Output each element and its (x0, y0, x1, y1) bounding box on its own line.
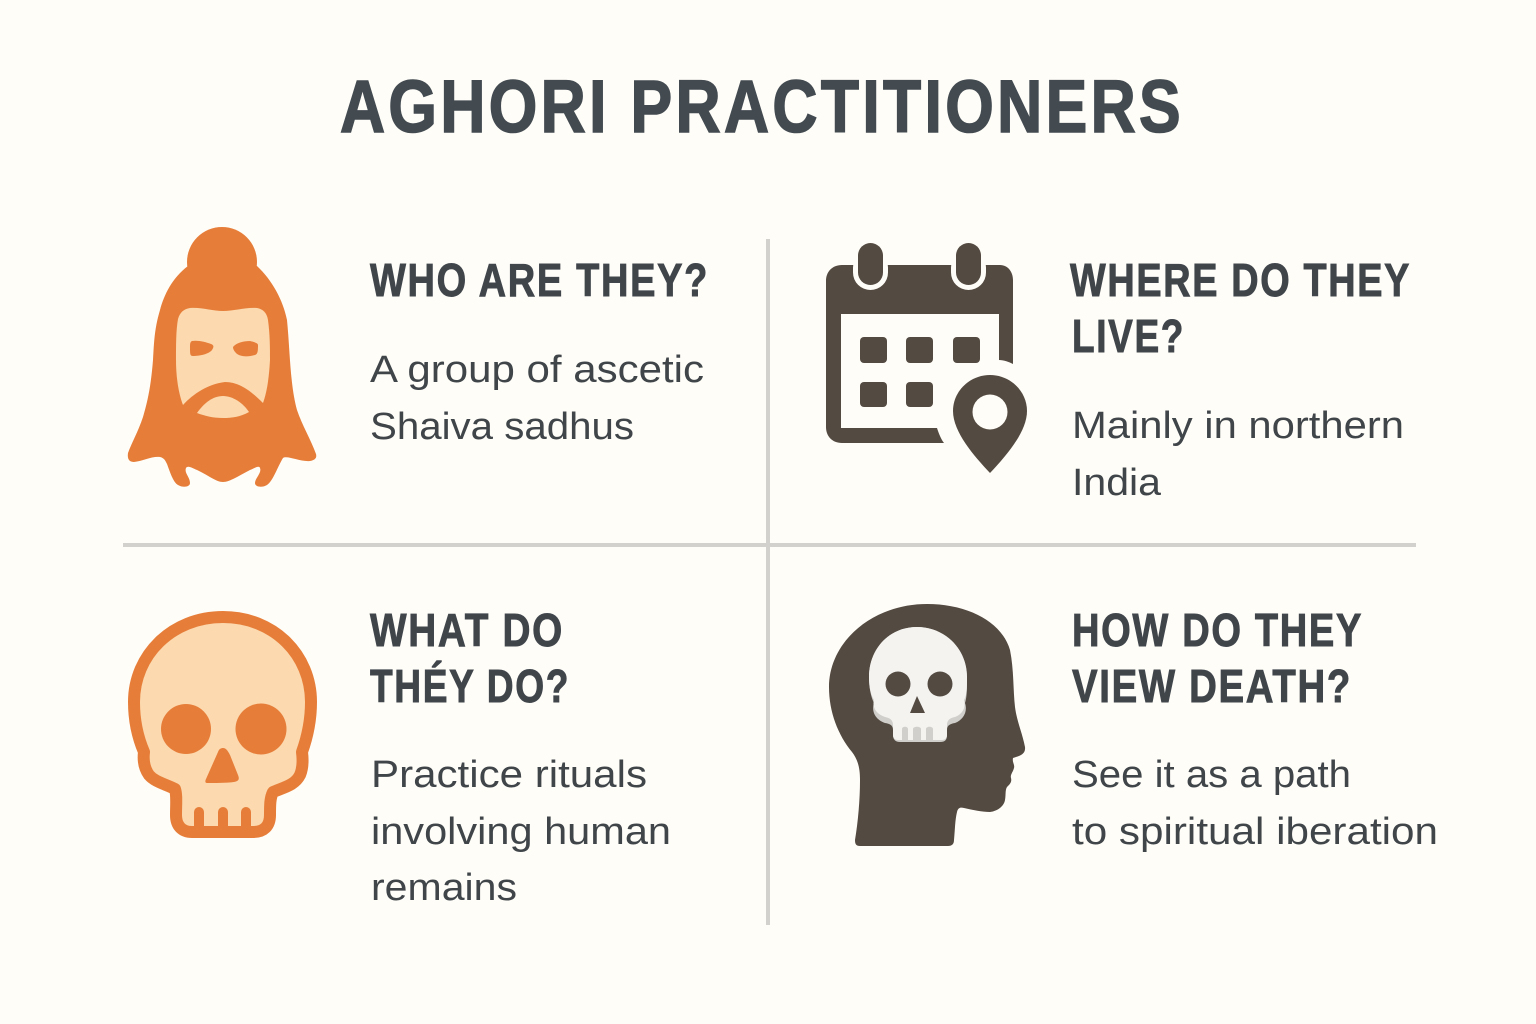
body: who are they (370, 349, 704, 448)
body: what do they do: remains (371, 867, 517, 909)
heading: what do they do (370, 604, 570, 712)
body: where do they live (1072, 405, 1404, 504)
heading: how do they view death: VIEW DEATH? (1072, 660, 1352, 712)
body: what do they do: Practice rituals (371, 754, 647, 796)
heading: what do they do: WHAT DO (370, 604, 564, 656)
icon: calendar with location pin (826, 240, 1027, 473)
heading: how do they view death: HOW DO THEY (1072, 604, 1363, 656)
heading: how do they view death (1072, 604, 1363, 712)
icon: head silhouette with skull (829, 604, 1025, 846)
body: how do they view death: to spiritual iberation (1072, 811, 1438, 853)
body: who are they: A group of ascetic (370, 349, 704, 391)
title: AGHORI PRACTITIONERS (340, 65, 1184, 148)
body: how do they view death: See it as a path (1072, 754, 1351, 796)
icon: orange skull (134, 617, 311, 832)
body: what do they do: involving human (371, 811, 671, 853)
body: where do they live: Mainly in northern (1072, 405, 1404, 447)
body: what do they do (371, 754, 671, 909)
heading: who are they: WHO ARE THEY? (370, 254, 709, 306)
icon: sadhu head with topknot and beard (128, 227, 316, 487)
heading: where do they live: WHERE DO THEY (1070, 254, 1411, 306)
body: how do they view death (1072, 754, 1438, 853)
panel: who are they (128, 227, 709, 487)
body: where do they live: India (1072, 462, 1162, 504)
panel: what do they do (134, 604, 671, 909)
panel: where do they live (826, 240, 1411, 504)
heading: where do they live (1070, 254, 1411, 362)
heading: where do they live: LIVE? (1072, 310, 1185, 362)
body: who are they: Shaiva sadhus (370, 406, 634, 448)
heading: what do they do: THÉY DO? (370, 660, 570, 712)
panel: how do they view death (829, 604, 1438, 853)
